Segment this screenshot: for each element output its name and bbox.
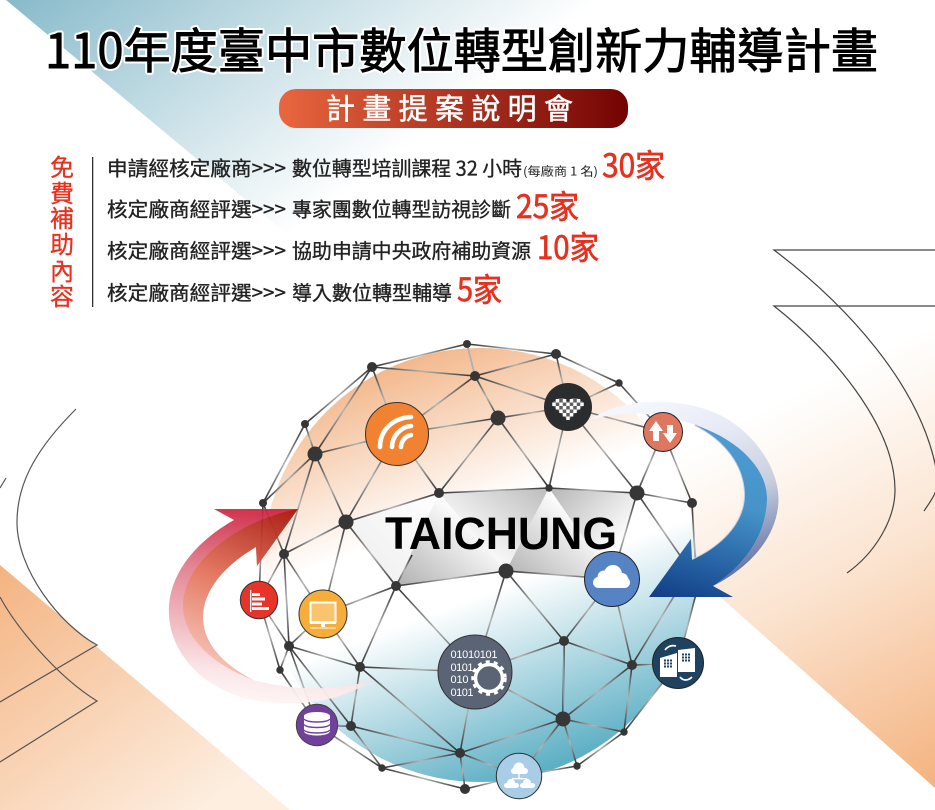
icon: bar chart bbox=[240, 581, 278, 619]
list row 4: 導入數位轉型輔導 bbox=[292, 277, 452, 306]
list row 3: 核定廠商經評選>>> bbox=[107, 235, 286, 264]
arrow: red clockwise bbox=[169, 509, 373, 703]
TAICHUNG grey facet band bbox=[346, 488, 637, 586]
list row 2: 專家團數位轉型訪視診斷 bbox=[292, 194, 511, 222]
list row 2: 25家 bbox=[516, 182, 579, 228]
icon: wifi bbox=[366, 402, 428, 466]
icon: up and down arrows bbox=[644, 412, 682, 452]
background: teal triangle top left bbox=[6, 0, 640, 245]
list row 4: 核定廠商經評選>>> bbox=[107, 277, 286, 306]
icon: monitor bbox=[299, 590, 347, 638]
network lines bbox=[259, 344, 697, 789]
arrow: blue clockwise bbox=[590, 402, 779, 597]
list row 1: (每廠商 1 名) bbox=[523, 162, 598, 180]
list row 3: 10家 bbox=[537, 223, 599, 269]
network nodes bbox=[259, 340, 697, 794]
side label: free subsidy content: 費 bbox=[50, 174, 74, 209]
title: 110年度臺中市數位轉型創新力輔導計畫 bbox=[45, 12, 878, 82]
icon: binary and gear: 010 bbox=[450, 674, 468, 686]
list row 4 bbox=[107, 265, 502, 311]
list row 1 bbox=[107, 141, 665, 187]
decorative curves right bbox=[774, 250, 935, 573]
icon: binary and gear bbox=[438, 635, 512, 709]
side label: free subsidy content: 免 bbox=[50, 148, 74, 183]
side label: free subsidy content: 內 bbox=[50, 252, 74, 287]
label: TAICHUNG: TAICHUNG bbox=[385, 508, 617, 559]
list row 2 bbox=[107, 182, 579, 228]
icon: buildings exchange bbox=[652, 638, 704, 688]
side label: free subsidy content: 助 bbox=[50, 225, 74, 260]
icon: binary and gear: 0101 bbox=[450, 687, 474, 699]
list row 4: 5家 bbox=[457, 265, 502, 311]
icon: database bbox=[296, 704, 338, 746]
divider line bbox=[92, 157, 93, 307]
sphere base bbox=[263, 348, 697, 782]
side label: free subsidy content: 補 bbox=[50, 199, 74, 234]
icon: cloud tree bbox=[496, 753, 542, 799]
list row 3 bbox=[107, 223, 599, 269]
decorative curves left bbox=[0, 409, 97, 762]
title: 110年度臺中市數位轉型創新力輔導計畫 bbox=[45, 12, 878, 82]
icon: cloud bbox=[584, 552, 640, 606]
icon: binary and gear: 0101 bbox=[450, 662, 474, 674]
list row 2: 核定廠商經評選>>> bbox=[107, 194, 286, 222]
icon: binary and gear: 01010101 bbox=[450, 649, 498, 661]
list row 1: 數位轉型培訓課程 32 小時 bbox=[292, 152, 522, 182]
list row 3: 協助申請中央政府補助資源 bbox=[292, 235, 531, 264]
subtitle pill: 計畫提案說明會 bbox=[326, 86, 573, 128]
background: peach triangle bottom left bbox=[0, 565, 290, 810]
side label: free subsidy content: 容 bbox=[50, 277, 74, 312]
background: peach triangle right bbox=[600, 190, 935, 788]
icon: pixel heart bbox=[544, 383, 592, 431]
list row 1: 申請經核定廠商>>> bbox=[107, 152, 286, 182]
side label: free subsidy content bbox=[50, 148, 74, 312]
list row 1: 30家 bbox=[602, 141, 665, 187]
